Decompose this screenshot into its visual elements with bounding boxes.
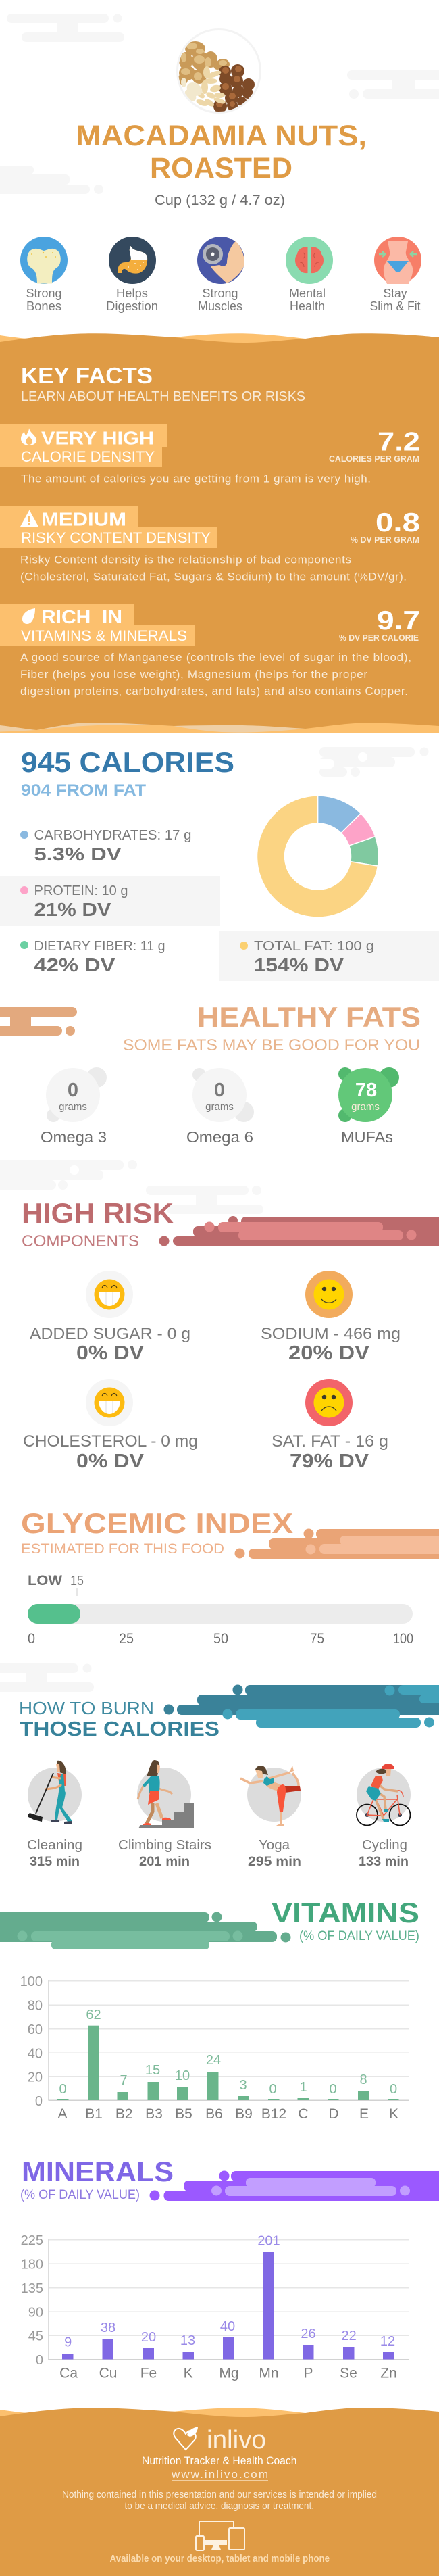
benefit: mental health: Health [290, 299, 325, 313]
benefit: strong bones: Bones [26, 299, 61, 313]
fact: calorie density: The amount of calories you are getting from 1 gram is very high. [21, 472, 371, 485]
benefit: stay slim and fit [370, 237, 421, 313]
vitamins bar chart: 100 [20, 1974, 43, 1989]
key facts heading [21, 363, 305, 404]
fact: risky content density: 0.8 [376, 508, 420, 537]
minerals bar chart: P [303, 2366, 313, 2381]
fat: omega 3: Omega 3 [41, 1128, 107, 1146]
high risk heading [22, 1197, 174, 1250]
vitamins bar chart: 0 [35, 2094, 43, 2109]
minerals heading: (% OF DAILY VALUE) [20, 2187, 140, 2202]
vitamins bar chart: 0 [269, 2082, 277, 2097]
legend: protein: PROTEIN: 10 g [34, 883, 128, 898]
healthy fats heading [123, 1001, 421, 1054]
vitamins bar chart: 1 [299, 2080, 307, 2095]
high risk heading: COMPONENTS [22, 1232, 139, 1250]
benefit: stay slim and fit: Stay [384, 287, 407, 300]
vitamins bar chart: 15 [145, 2063, 160, 2078]
minerals bar chart: 38 [101, 2320, 115, 2335]
fact: risky content density: RISKY CONTENT DENSITY [21, 529, 211, 546]
website link: www.inlivo.com [171, 2468, 268, 2481]
risk: added sugar [30, 1271, 190, 1364]
fat: mufas [338, 1067, 399, 1146]
logo: inlivo: inlivo [207, 2426, 266, 2454]
fact: calorie density: 7.2 [378, 427, 420, 457]
legend: total fat [220, 931, 439, 981]
fact: risky content density: Risky Content density is the relationship of bad components [20, 554, 351, 566]
calories heading: 904 FROM FAT [21, 781, 146, 800]
minerals heading [20, 2156, 174, 2202]
fat: omega 3: 0 [68, 1079, 78, 1101]
benefit: mental health [286, 237, 333, 313]
fact: calorie density: VERY HIGH [41, 428, 154, 449]
benefit: stay slim and fit: Slim & Fit [370, 299, 420, 313]
donut chart [257, 796, 379, 917]
fact: rich in vitamins and minerals: % DV PER CALORIE [339, 633, 419, 643]
benefit: helps digestion: Helps [116, 287, 148, 300]
risk: added sugar: 0% DV [76, 1342, 145, 1364]
glycemic index gauge [28, 1573, 413, 1647]
background cloud burn [0, 1663, 94, 1692]
activity: yoga [240, 1766, 301, 1869]
fat: omega 6 [186, 1068, 254, 1146]
title: MACADAMIA NUTS, [76, 120, 367, 152]
legend: dietary fiber [20, 939, 165, 975]
panel: footer [0, 2408, 439, 2576]
minerals bar chart: 135 [21, 2281, 43, 2296]
glycemic index decoration [235, 1529, 439, 1559]
minerals bar chart: 13 [180, 2333, 195, 2348]
key facts heading: KEY FACTS [21, 363, 153, 388]
food image: nuts [177, 30, 261, 113]
minerals bar chart: K [184, 2366, 193, 2381]
fat: mufas: 78 [355, 1079, 377, 1101]
vitamins bar chart: 7 [120, 2073, 128, 2088]
icon: grinning face [95, 1387, 124, 1418]
tagline: Nutrition Tracker & Health Coach [142, 2454, 297, 2467]
vitamins bar chart: B1 [85, 2106, 103, 2122]
minerals bar chart: Cu [99, 2366, 117, 2381]
glycemic index gauge: 75 [310, 1631, 324, 1647]
minerals bar chart: 225 [21, 2233, 43, 2248]
vitamins bar chart: 0 [329, 2082, 337, 2097]
fact: calorie density [0, 424, 420, 485]
minerals bar chart: 20 [141, 2330, 156, 2345]
legend: dietary fiber: 42% DV [34, 954, 115, 975]
activity: cycling: 133 min [359, 1855, 409, 1869]
benefit: strong bones: Strong [26, 287, 62, 300]
vitamins heading: (% OF DAILY VALUE) [299, 1928, 419, 1943]
glycemic index gauge: 15 [70, 1574, 84, 1588]
vitamins bar chart: C [298, 2106, 309, 2122]
vitamins bar chart: B3 [145, 2106, 163, 2122]
disclaimer [62, 2489, 377, 2512]
activity: cycling [357, 1764, 411, 1869]
minerals heading: MINERALS [22, 2156, 174, 2187]
icon: sad face [313, 1387, 344, 1418]
icon: grinning face [95, 1279, 124, 1310]
vitamins bar chart [20, 1974, 409, 2122]
minerals bar chart: Zn [380, 2366, 397, 2381]
glycemic index gauge: 25 [119, 1631, 134, 1647]
glycemic index gauge: 0 [28, 1631, 35, 1647]
icon: warning triangle [20, 510, 38, 527]
minerals bar chart: Mn [259, 2366, 279, 2381]
legend: protein [0, 876, 220, 926]
fact: risky content density: (Cholesterol, Saturated Fat, Sugars & Sodium) to the amount (%DV/gr). [20, 570, 407, 583]
high risk decoration [159, 1216, 439, 1246]
glycemic index gauge: 100 [393, 1631, 413, 1647]
title: ROASTED [150, 152, 292, 185]
glycemic index heading: ESTIMATED FOR THIS FOOD [21, 1541, 224, 1557]
vitamins decoration [0, 1912, 290, 1949]
burn heading: HOW TO BURN [19, 1698, 154, 1718]
icon: devices [196, 2521, 244, 2550]
vitamins bar chart: 62 [86, 2008, 101, 2022]
fact: rich in vitamins and minerals: digestion proteins, carbohydrates, and fats) and also contains Copper. [20, 685, 408, 698]
fact: risky content density: MEDIUM [41, 508, 126, 530]
vitamins bar chart: A [57, 2106, 68, 2122]
fact: calorie density: CALORIE DENSITY [21, 448, 155, 465]
burn decoration [163, 1684, 439, 1728]
activity: cleaning [27, 1761, 82, 1869]
vitamins bar chart: 20 [28, 2070, 43, 2085]
minerals bar chart: 90 [28, 2305, 43, 2320]
activity: cleaning: Cleaning [27, 1838, 82, 1853]
risk: added sugar: ADDED SUGAR - 0 g [30, 1325, 190, 1343]
minerals bar chart: 0 [36, 2353, 43, 2368]
fat: omega 6: grams [205, 1101, 234, 1113]
glycemic index gauge: 50 [213, 1631, 228, 1647]
panel: key facts [0, 333, 439, 733]
vitamins bar chart: B5 [175, 2106, 192, 2122]
legend: total fat: 154% DV [254, 954, 344, 975]
benefit: strong muscles [197, 237, 244, 313]
benefit: strong muscles: Muscles [198, 299, 242, 313]
vitamins bar chart: 10 [175, 2068, 190, 2083]
vitamins bar chart: 3 [239, 2078, 247, 2093]
vitamins heading: VITAMINS [272, 1897, 419, 1928]
fat: mufas: grams [351, 1101, 380, 1113]
high risk heading: HIGH RISK [22, 1197, 174, 1229]
benefit: mental health: Mental [289, 287, 326, 300]
minerals bar chart: Se [340, 2366, 357, 2381]
benefit: helps digestion: Digestion [106, 299, 158, 313]
risk: sodium [261, 1271, 401, 1364]
fat: omega 3 [41, 1067, 107, 1146]
risk: saturated fat: 79% DV [290, 1451, 369, 1472]
minerals bar chart: 9 [64, 2335, 72, 2350]
activity: climbing stairs: 201 min [139, 1855, 190, 1869]
activity: climbing stairs: Climbing Stairs [118, 1838, 211, 1853]
risk: saturated fat [272, 1379, 388, 1472]
minerals bar chart: 12 [380, 2334, 395, 2349]
vitamins heading [272, 1897, 419, 1943]
minerals bar chart: 22 [341, 2329, 357, 2343]
legend: protein: 21% DV [34, 899, 111, 920]
vitamins bar chart: E [359, 2106, 369, 2122]
fact: calorie density: CALORIES PER GRAM [329, 454, 419, 464]
fat: omega 6: Omega 6 [186, 1128, 253, 1146]
vitamins bar chart: B2 [115, 2106, 133, 2122]
vitamins bar chart: B6 [205, 2106, 223, 2122]
burn heading [19, 1698, 220, 1741]
minerals bar chart: 201 [257, 2234, 280, 2249]
calories heading [21, 746, 428, 800]
benefit: helps digestion [106, 237, 158, 313]
vitamins bar chart: 24 [206, 2053, 221, 2068]
fact: risky content density [0, 506, 420, 583]
minerals bar chart: Mg [219, 2366, 239, 2381]
minerals bar chart: 45 [28, 2329, 43, 2344]
disclaimer: Nothing contained in this presentation and our services is intended or implied [62, 2489, 377, 2500]
risk: sodium: 20% DV [288, 1342, 370, 1364]
minerals bar chart [21, 2233, 409, 2381]
minerals bar chart: 26 [301, 2327, 316, 2341]
vitamins bar chart: 8 [359, 2072, 367, 2087]
fact: rich in vitamins and minerals: A good source of Manganese (controls the level of sugar in the blood), [20, 651, 411, 664]
fact: rich in vitamins and minerals: 9.7 [377, 606, 420, 635]
vitamins bar chart: B12 [261, 2106, 286, 2122]
vitamins bar chart: 60 [28, 2022, 43, 2037]
vitamins bar chart: 0 [59, 2082, 67, 2097]
risk: sodium: SODIUM - 466 mg [261, 1325, 401, 1343]
vitamins bar chart: K [389, 2106, 398, 2122]
icon: leaf [22, 608, 35, 624]
fact: risky content density: % DV PER GRAM [351, 535, 419, 545]
fat: mufas: MUFAs [341, 1128, 393, 1146]
minerals bar chart: Ca [59, 2366, 78, 2381]
key facts heading: LEARN ABOUT HEALTH BENEFITS OR RISKS [21, 389, 305, 404]
activity: yoga: 295 min [248, 1855, 301, 1869]
fact: rich in vitamins and minerals: VITAMINS & MINERALS [21, 627, 187, 644]
background clouds top [0, 14, 439, 194]
burn heading: THOSE CALORIES [20, 1717, 220, 1741]
availability note: Available on your desktop, tablet and mobile phone [109, 2553, 330, 2565]
fact: rich in vitamins and minerals: Fiber (helps you lose weight), Magnesium (helps for the proper [20, 668, 367, 681]
minerals bar chart: Fe [140, 2366, 157, 2381]
fact: rich in vitamins and minerals [0, 604, 420, 698]
activity: climbing stairs [118, 1760, 211, 1869]
disclaimer: to be a medical advice, diagnosis or treatment. [124, 2500, 314, 2512]
legend: dietary fiber: DIETARY FIBER: 11 g [34, 939, 165, 954]
risk: cholesterol: CHOLESTEROL - 0 mg [23, 1432, 198, 1451]
icon: smiling face [313, 1279, 344, 1310]
background clouds high risk [0, 1160, 263, 1214]
vitamins bar chart: 0 [390, 2082, 397, 2097]
legend: total fat: TOTAL FAT: 100 g [254, 939, 374, 954]
glycemic index heading [21, 1507, 293, 1557]
legend: carbohydrates: 5.3% DV [34, 844, 122, 865]
glycemic index gauge: LOW [28, 1573, 62, 1588]
logo: inlivo [174, 2426, 266, 2454]
risk: cholesterol: 0% DV [76, 1451, 145, 1472]
vitamins bar chart: 80 [28, 1998, 43, 2013]
healthy fats heading: HEALTHY FATS [197, 1001, 421, 1033]
benefit: strong muscles: Strong [203, 287, 238, 300]
glycemic index heading: GLYCEMIC INDEX [21, 1507, 293, 1539]
benefit: strong bones [20, 237, 68, 313]
icon: flame [21, 428, 36, 445]
legend: carbohydrates: CARBOHYDRATES: 17 g [34, 828, 192, 843]
fact: rich in vitamins and minerals: RICH IN [41, 606, 122, 627]
activity: yoga: Yoga [259, 1838, 290, 1853]
minerals bar chart: 180 [21, 2258, 43, 2273]
vitamins bar chart: D [328, 2106, 339, 2122]
title [76, 120, 367, 185]
serving size: Cup (132 g / 4.7 oz) [155, 192, 285, 208]
activity: cycling: Cycling [362, 1838, 407, 1853]
fat: omega 3: grams [59, 1101, 87, 1113]
legend: carbohydrates [20, 828, 192, 865]
minerals bar chart: 40 [220, 2319, 235, 2334]
calories heading: 945 CALORIES [21, 746, 234, 778]
activity: cleaning: 315 min [30, 1855, 80, 1869]
minerals decoration [150, 2171, 439, 2201]
vitamins bar chart: B9 [235, 2106, 253, 2122]
risk: cholesterol [23, 1379, 198, 1472]
risk: saturated fat: SAT. FAT - 16 g [272, 1432, 388, 1451]
fat: omega 6: 0 [214, 1079, 225, 1101]
vitamins bar chart: 40 [28, 2047, 43, 2062]
healthy fats decoration [0, 1007, 77, 1036]
healthy fats heading: SOME FATS MAY BE GOOD FOR YOU [123, 1036, 420, 1054]
